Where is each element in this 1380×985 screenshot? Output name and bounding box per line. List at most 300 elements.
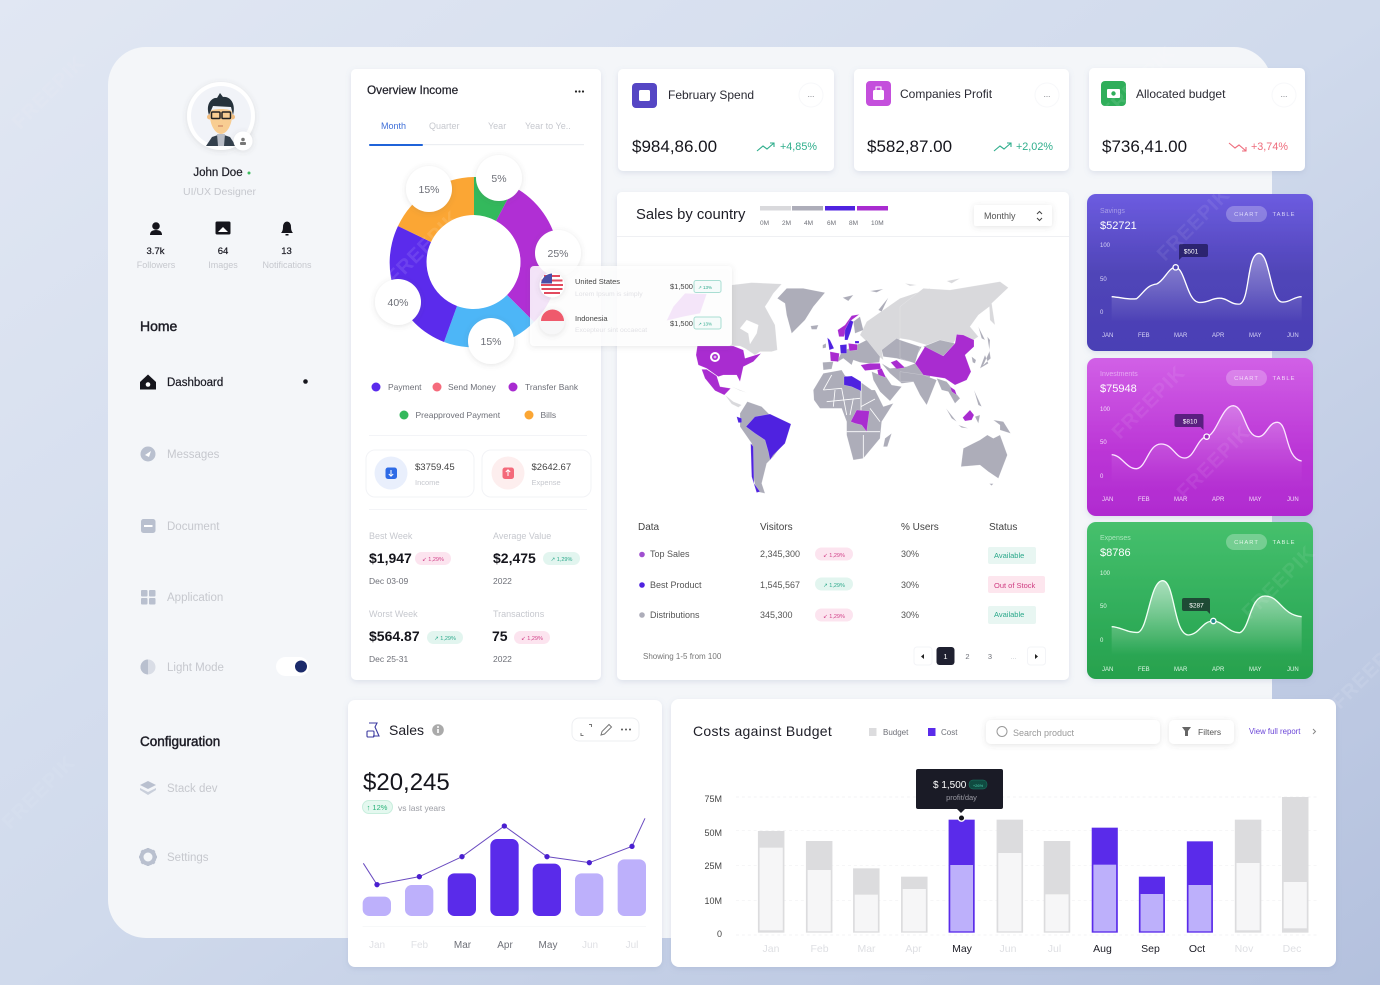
axis labels: MAY <box>1249 497 1262 503</box>
x axis labels: Mar <box>857 943 876 955</box>
region: spain <box>823 362 833 370</box>
row: united states <box>540 272 721 298</box>
axis labels: MAR <box>1174 333 1188 339</box>
label: 15% bills: 15% <box>418 184 440 196</box>
stat: followers: Followers <box>137 260 176 270</box>
chart/table toggle: TABLE <box>1273 376 1295 382</box>
region: iran and central asia <box>882 363 930 385</box>
axis labels: JAN <box>1102 667 1113 673</box>
tabs <box>369 121 584 146</box>
card: investments chart: $75948 <box>1100 383 1137 395</box>
x axis labels: Jan <box>369 940 385 951</box>
pagination: 3 <box>988 652 992 661</box>
region: poland <box>848 343 857 351</box>
region: turkmenistan <box>891 360 905 369</box>
region: greenland <box>777 288 825 333</box>
nav: dashboard <box>140 374 308 390</box>
axis labels: JUN <box>1287 333 1299 339</box>
watermarks: FREEPIK <box>1108 362 1190 444</box>
region: canada <box>700 283 782 355</box>
region: europe <box>837 340 880 365</box>
legend: Payment <box>388 382 422 392</box>
table row: best product <box>639 576 1045 593</box>
world map <box>667 278 1011 493</box>
table row: distributions: 30% <box>901 610 919 620</box>
region: kazakhstan <box>882 338 922 362</box>
axis labels: FEB <box>1138 667 1150 673</box>
axis labels: JAN <box>1102 333 1113 339</box>
card: allocated budget: +3,74% <box>1251 141 1288 153</box>
x axis labels: Dec <box>1283 943 1301 955</box>
nav: dashboard: Dashboard <box>167 377 223 389</box>
stat: notifications: 13 <box>281 246 292 257</box>
tabs: Year <box>488 121 506 131</box>
axis labels: FEB <box>1138 497 1150 503</box>
stat: images <box>208 222 238 270</box>
x axis labels <box>369 940 638 951</box>
map legend: 0M <box>760 220 769 227</box>
label: 15% bills <box>406 166 452 212</box>
tabs: Year to Ye.. <box>525 121 571 131</box>
user profile: UI/UX Designer <box>183 186 256 198</box>
nav: light mode <box>140 657 309 676</box>
axis labels: MAR <box>1174 667 1188 673</box>
budget bars <box>758 797 1308 933</box>
row: indonesia: $1,500 <box>670 319 693 328</box>
card: february spend: February Spend <box>668 88 754 102</box>
dashboard base panel <box>108 47 1272 938</box>
stat: images: Images <box>208 260 238 270</box>
tooltip: profit per day <box>916 769 1003 821</box>
chart/table toggle: TABLE <box>1273 212 1295 218</box>
card: companies profit <box>854 69 1069 171</box>
region: african borders <box>823 375 880 458</box>
map: americas and atlantic <box>667 283 825 493</box>
card: companies profit: ... <box>1044 90 1050 99</box>
label: 15% transfer: 15% <box>480 336 502 348</box>
stat: average value: $2,475 <box>493 550 536 566</box>
watermarks: FREEPIK <box>1238 542 1320 624</box>
row: united states: $1,500 <box>670 282 693 291</box>
label: 5% <box>476 155 522 201</box>
legend <box>372 382 579 420</box>
tooltip: $810 <box>1174 414 1204 430</box>
stat: worst week: Dec 25-31 <box>369 654 408 664</box>
chart/table toggle <box>1226 534 1295 550</box>
stat: best week: ↙ 1,29% <box>422 557 444 563</box>
axis labels: FEB <box>1138 333 1150 339</box>
watermarks: FREEPIK <box>8 52 90 134</box>
table row: top sales: 30% <box>901 549 919 559</box>
icon: more menu <box>575 90 584 93</box>
table row: top sales: Top Sales <box>650 549 690 559</box>
region: mongolia <box>923 340 955 356</box>
card: investments chart: Investments <box>1100 371 1138 378</box>
map legend: 8M <box>849 220 858 227</box>
bar chart <box>736 797 1319 935</box>
table header: % Users <box>901 522 939 533</box>
tabs: Quarter <box>429 121 460 131</box>
axis labels: MAR <box>1174 497 1188 503</box>
stat: best week: $1,947 <box>369 550 412 566</box>
table row: top sales: ↙ 1,29% <box>823 553 845 559</box>
region: libya <box>844 376 861 391</box>
region: india <box>900 372 937 405</box>
icon: avatar <box>206 93 236 146</box>
tooltip: $287: $287 <box>1189 602 1204 610</box>
line chart <box>1112 253 1302 322</box>
label: 40% <box>375 279 421 325</box>
x axis labels: Apr <box>905 943 922 955</box>
stat: followers: 3.7k <box>147 246 165 257</box>
card: savings chart <box>1087 194 1313 351</box>
x axis labels: Jun <box>582 940 598 951</box>
icon: sales bag <box>367 723 379 737</box>
y axis labels: 0 <box>717 929 722 939</box>
region: central asia east <box>900 340 920 363</box>
stat: notifications: Notifications <box>262 260 312 270</box>
region: germany <box>840 344 847 353</box>
chart/table toggle <box>1226 370 1295 386</box>
table row: distributions: ↙ 1,29% <box>823 614 845 620</box>
axis labels <box>1100 571 1299 673</box>
legend: Bills <box>540 410 556 420</box>
icon: info <box>432 724 444 736</box>
tabs: Month <box>381 121 406 131</box>
toolbar <box>572 718 639 741</box>
stat: average value: ↗ 1,29% <box>551 557 572 563</box>
axis labels: 0 <box>1100 310 1104 316</box>
card: expenses chart: $8786 <box>1100 547 1131 559</box>
user profile <box>183 82 256 198</box>
donut chart <box>375 155 581 364</box>
axis labels: APR <box>1212 333 1225 339</box>
stat: average value <box>493 531 580 586</box>
watermarks: FREEPIK <box>383 207 465 289</box>
combo chart <box>363 818 646 927</box>
axis labels: 0 <box>1100 638 1104 644</box>
axis labels: 0 <box>1100 474 1104 480</box>
region: iraq <box>877 368 886 378</box>
row: united states: Lorem Ipsum is simply <box>575 291 643 298</box>
nav: settings <box>139 848 209 866</box>
search box <box>986 720 1160 744</box>
region: lithuania <box>855 341 859 343</box>
row: indonesia: ↗ 13% <box>698 322 712 326</box>
table row: top sales: 2,345,300 <box>760 549 800 559</box>
table row: best product: 30% <box>901 580 919 590</box>
legend: Send Money <box>448 382 496 392</box>
tooltip: $501: $501 <box>1184 248 1199 256</box>
y axis labels: 50M <box>704 828 722 838</box>
user profile: John Doe <box>193 167 243 179</box>
heading: home: Home <box>140 318 178 334</box>
stat: worst week: $564.87 <box>369 628 420 644</box>
stat: transactions: Transactions <box>493 609 545 619</box>
region: ireland <box>823 343 826 348</box>
region: madagascar <box>883 433 892 447</box>
table row: distributions: 345,300 <box>760 610 793 620</box>
y axis labels <box>704 794 722 939</box>
link: view full report: View full report <box>1249 727 1301 736</box>
stat: average value: Average Value <box>493 531 551 541</box>
label: 5%: 5% <box>491 173 507 185</box>
chart/table toggle: CHART <box>1234 212 1259 218</box>
axis labels: 50 <box>1100 604 1107 610</box>
table row: best product: 1,545,567 <box>760 580 800 590</box>
row: indonesia: Excepteur sint occaecat <box>575 327 647 334</box>
card: investments chart <box>1087 358 1313 516</box>
card: allocated budget: Allocated budget <box>1136 87 1226 101</box>
panel: sales <box>348 700 662 967</box>
region: hudson bay <box>740 320 758 344</box>
axis labels: 100 <box>1100 571 1111 577</box>
table row: distributions: Available <box>994 610 1024 619</box>
map legend: 2M <box>782 220 791 227</box>
income card: Income <box>415 478 440 487</box>
region: ecuador <box>737 417 742 423</box>
panel: overview income <box>351 69 601 680</box>
nav: messages: Messages <box>167 449 220 461</box>
region: borneo <box>963 410 974 421</box>
region: southeast asia <box>937 378 960 403</box>
x axis labels <box>763 943 1301 955</box>
row: united states: ↗ 13% <box>698 285 712 290</box>
axis labels: MAY <box>1249 333 1262 339</box>
table row: top sales <box>639 547 1036 564</box>
card: companies profit: $582,87.00 <box>867 137 952 156</box>
map legend: 6M <box>827 220 836 227</box>
y axis labels: 10M <box>704 896 722 906</box>
x axis labels: Jun <box>1000 943 1017 955</box>
tooltip: $810: $810 <box>1183 418 1198 426</box>
stat: transactions: 2022 <box>493 654 512 664</box>
filters button <box>1169 720 1234 744</box>
heading: overview income: Overview Income <box>367 83 459 97</box>
region: japan, korea, sakhalin <box>972 327 991 368</box>
region: indonesia and philippines <box>946 390 1011 433</box>
card: expenses chart <box>1087 522 1313 679</box>
label: 15% transfer <box>468 318 514 364</box>
chart/table toggle: CHART <box>1234 376 1259 382</box>
region: france <box>830 352 839 362</box>
region: tasmania <box>989 484 993 486</box>
stat: worst week: ↗ 1,29% <box>434 636 456 642</box>
expense card: Expense <box>532 478 561 487</box>
region: central america and caribbean <box>725 387 747 407</box>
tooltip: $287 <box>1182 598 1210 614</box>
table header <box>638 522 1017 533</box>
map legend <box>760 206 888 227</box>
table header: Visitors <box>760 522 793 533</box>
card: savings chart: $52721 <box>1100 220 1137 232</box>
region: australia <box>961 435 1007 478</box>
filters button: Filters <box>1198 727 1221 737</box>
x axis labels: Jan <box>763 943 780 955</box>
label: 25% <box>535 230 581 276</box>
tooltip: profit per day: profit/day <box>946 793 977 802</box>
table row: distributions: Distributions <box>650 610 700 620</box>
y axis labels: 25M <box>704 861 722 871</box>
table row: best product: Out of Stock <box>994 581 1036 590</box>
region: usa <box>696 346 761 382</box>
legend: Budget <box>883 728 909 737</box>
card: companies profit: +2,02% <box>1016 141 1053 153</box>
table header: Data <box>638 522 660 533</box>
x axis labels: Aug <box>1093 943 1112 955</box>
tooltip: profit per day: $ 1,500 <box>933 780 967 791</box>
pagination: ... <box>1010 652 1017 661</box>
stat: best week <box>369 531 451 586</box>
stat: worst week <box>369 609 463 664</box>
nav: light mode: Light Mode <box>167 662 224 674</box>
row: united states: United States <box>575 277 620 286</box>
icon: banknote <box>1101 81 1126 106</box>
income card <box>366 450 474 497</box>
axis labels: MAY <box>1249 667 1262 673</box>
card: expenses chart: Expenses <box>1100 535 1131 542</box>
expense card <box>482 450 591 497</box>
legend: Cost <box>941 728 958 737</box>
heading: sales by country: Sales by country <box>636 207 746 223</box>
card: allocated budget: $736,41.00 <box>1102 137 1187 156</box>
axis labels <box>1100 243 1299 339</box>
nav: document <box>141 519 220 533</box>
label: 40%: 40% <box>387 297 409 309</box>
card: february spend: $984,86.00 <box>632 137 717 156</box>
region: dr congo <box>851 410 869 432</box>
stat: worst week: Worst Week <box>369 609 418 619</box>
table row: best product: Best Product <box>650 580 702 590</box>
region: alaska <box>667 293 707 321</box>
income card: $3759.45 <box>415 462 455 473</box>
chart/table toggle: CHART <box>1234 540 1259 546</box>
table footer text: Showing 1-5 from 100 <box>643 652 722 661</box>
growth badge <box>362 800 445 814</box>
axis labels: 100 <box>1100 407 1111 413</box>
watermarks: FREEPIK <box>1098 42 1180 124</box>
heading: sales: Sales <box>389 722 424 738</box>
chart/table toggle: TABLE <box>1273 540 1295 546</box>
legend <box>869 728 958 737</box>
stat: transactions: 75 <box>492 628 508 644</box>
region: western russia <box>860 288 930 360</box>
card: february spend: ... <box>808 90 814 99</box>
legend: Preapproved Payment <box>416 410 501 420</box>
map legend: 10M <box>871 220 884 227</box>
stat: notifications <box>262 222 312 270</box>
heading: costs against budget: Costs against Budget <box>693 723 832 739</box>
growth badge: ↑ 12% <box>367 803 388 812</box>
x axis labels: Sep <box>1141 943 1160 955</box>
region: china <box>915 334 974 385</box>
axis labels <box>1100 407 1299 503</box>
icon: wallet <box>632 83 657 108</box>
nav: stack dev <box>140 781 218 795</box>
nav: document: Document <box>167 521 220 533</box>
watermarks: FREEPIK <box>0 752 80 834</box>
region: uk <box>827 338 834 350</box>
card: companies profit: Companies Profit <box>900 87 993 101</box>
map: asia and oceania <box>900 278 1011 486</box>
card: february spend <box>618 69 834 171</box>
table row: distributions <box>639 606 1036 624</box>
region: arctic islands east <box>905 278 960 286</box>
nav: application: Application <box>167 592 223 604</box>
watermarks: FREEPIK <box>1173 422 1255 504</box>
axis labels: APR <box>1212 497 1225 503</box>
heading: configuration: Configuration <box>140 734 220 749</box>
pagination: 2 <box>965 652 970 661</box>
table header: Status <box>989 522 1017 533</box>
stat: followers <box>137 222 176 270</box>
expense card: $2642.67 <box>532 462 571 473</box>
icon: briefcase <box>866 81 891 106</box>
dropdown: monthly <box>974 205 1052 226</box>
region: finland <box>853 317 863 333</box>
row: indonesia <box>540 310 721 334</box>
region: norway <box>838 314 859 337</box>
axis labels: JUN <box>1287 497 1299 503</box>
stat: transactions: ↙ 1,29% <box>521 636 543 642</box>
cost bars <box>949 820 1213 933</box>
axis labels: 100 <box>1100 243 1111 249</box>
region: turkey <box>861 363 881 371</box>
line chart <box>1112 581 1302 655</box>
map location marker <box>710 352 720 362</box>
pagination <box>914 647 1046 665</box>
axis labels: APR <box>1212 667 1225 673</box>
sidebar <box>137 82 312 866</box>
card: allocated budget <box>1089 68 1305 171</box>
x axis labels: Feb <box>411 940 429 951</box>
x axis labels: May <box>952 943 973 955</box>
x axis labels: Nov <box>1235 943 1254 955</box>
table row: best product: ↗ 1,29% <box>823 583 845 589</box>
stat: best week: Best Week <box>369 531 413 541</box>
region: africa <box>813 370 893 460</box>
x axis labels: May <box>539 940 557 951</box>
tooltip: profit per day: +26% <box>973 783 984 788</box>
axis labels: JUN <box>1287 667 1299 673</box>
region: thailand <box>950 387 957 395</box>
row: indonesia: Indonesia <box>575 314 608 323</box>
x axis labels: Feb <box>810 943 829 955</box>
card: allocated budget: ... <box>1281 90 1287 99</box>
region: arabia <box>872 372 902 401</box>
growth badge: vs last years <box>398 803 445 813</box>
stat: transactions <box>492 609 550 664</box>
chart/table toggle <box>1226 206 1295 222</box>
stat: average value: 2022 <box>493 576 512 586</box>
nav: application <box>141 590 223 604</box>
legend: Transfer Bank <box>525 382 579 392</box>
stat: images: 64 <box>218 246 228 257</box>
total value: $20,245 <box>363 769 450 796</box>
region: chile <box>751 443 760 493</box>
region: mexico <box>702 369 731 395</box>
region: south america <box>740 402 790 493</box>
axis labels: 50 <box>1100 277 1107 283</box>
nav: messages <box>140 446 220 462</box>
x axis labels: Jul <box>1048 943 1061 955</box>
pagination: 1 <box>943 652 948 661</box>
x axis labels: Jul <box>626 940 638 951</box>
region: arctic islands <box>843 289 888 312</box>
card: february spend: +4,85% <box>780 141 817 153</box>
dropdown: monthly: Monthly <box>984 211 1016 221</box>
search box: Search product <box>1013 728 1075 738</box>
